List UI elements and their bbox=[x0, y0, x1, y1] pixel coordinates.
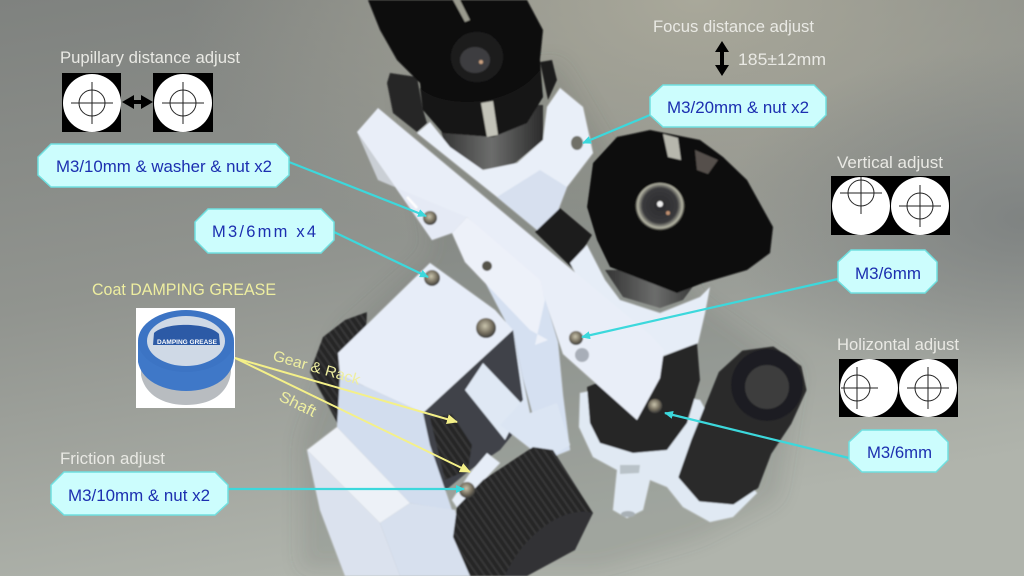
callout: lower right M3/6mm bbox=[849, 430, 948, 472]
right black eyepiece spare bbox=[680, 348, 805, 503]
main diagonal plate bbox=[357, 108, 664, 420]
callout: upper right M3/6mm: M3/6mm bbox=[855, 265, 921, 283]
horizontal reticles bbox=[839, 359, 958, 417]
leader: M3/6mm x4 bbox=[334, 232, 428, 277]
horizontal adjust label: Holizontal adjust bbox=[837, 336, 959, 354]
damping grease photo bbox=[136, 308, 235, 408]
focus distance label: Focus distance adjust bbox=[653, 18, 814, 36]
dark gap behind plate bbox=[535, 208, 592, 268]
gear block bbox=[337, 263, 570, 512]
callout: M3/10mm nut: M3/10mm & nut x2 bbox=[68, 487, 210, 505]
focus vertical arrow bbox=[715, 41, 729, 76]
rear tube bbox=[440, 105, 543, 170]
photo: stereo microscope assembly bbox=[300, 0, 805, 576]
big front knob bbox=[453, 447, 593, 576]
slider bbox=[452, 217, 548, 345]
pupillary reticle right bbox=[153, 73, 213, 132]
leader: washer screw bbox=[289, 162, 426, 216]
leader: shaft bbox=[235, 358, 470, 472]
front eyepiece holder bbox=[570, 245, 710, 357]
leader: M3/20mm bbox=[583, 115, 650, 143]
damping grease photo: DAMPING GREASE bbox=[157, 339, 218, 346]
callout: M3/10mm nut bbox=[51, 472, 228, 515]
left rear black knob bbox=[310, 312, 367, 428]
callout: M3/20mm nut: M3/20mm & nut x2 bbox=[667, 99, 809, 117]
front eyepiece cup bbox=[587, 130, 773, 293]
screws bbox=[423, 211, 662, 498]
friction adjust label: Friction adjust bbox=[60, 450, 165, 468]
bottom block bbox=[307, 427, 470, 576]
leader: friction screw bbox=[228, 488, 464, 490]
callout: M3/10mm washer nut bbox=[38, 144, 289, 187]
rear holder bbox=[417, 88, 593, 230]
gear and rack label: Gear & Rack bbox=[271, 348, 363, 389]
grease heading: Coat DAMPING GREASE bbox=[92, 281, 276, 299]
callout: lower right M3/6mm: M3/6mm bbox=[867, 444, 932, 462]
vertical adjust label: Vertical adjust bbox=[837, 154, 943, 172]
right column of gear body bbox=[485, 282, 570, 460]
leader: right M3/6mm upper bbox=[582, 279, 838, 337]
shaft label: Shaft bbox=[276, 388, 319, 421]
base ring bbox=[579, 385, 757, 522]
focus distance value: 185±12mm bbox=[738, 51, 826, 69]
rear eyepiece cup bbox=[368, 0, 543, 137]
callout: M3/6mm x4 bbox=[195, 209, 334, 253]
callout: M3/20mm nut bbox=[650, 85, 826, 127]
rear black knob bbox=[387, 73, 427, 132]
pupillary distance label: Pupillary distance adjust bbox=[60, 49, 240, 67]
leader: right M3/6mm lower bbox=[665, 413, 849, 458]
leader: gear and rack bbox=[235, 358, 457, 422]
pupillary reticle left bbox=[62, 73, 121, 132]
pupillary double arrow bbox=[122, 95, 153, 109]
callout: M3/6mm x4: M3/6mm x4 bbox=[212, 223, 316, 241]
lower black tube bbox=[587, 343, 700, 453]
vertical reticles bbox=[831, 176, 950, 235]
callout: M3/10mm washer nut: M3/10mm & washer & nut x2 bbox=[56, 158, 272, 176]
callout: upper right M3/6mm bbox=[838, 250, 937, 293]
